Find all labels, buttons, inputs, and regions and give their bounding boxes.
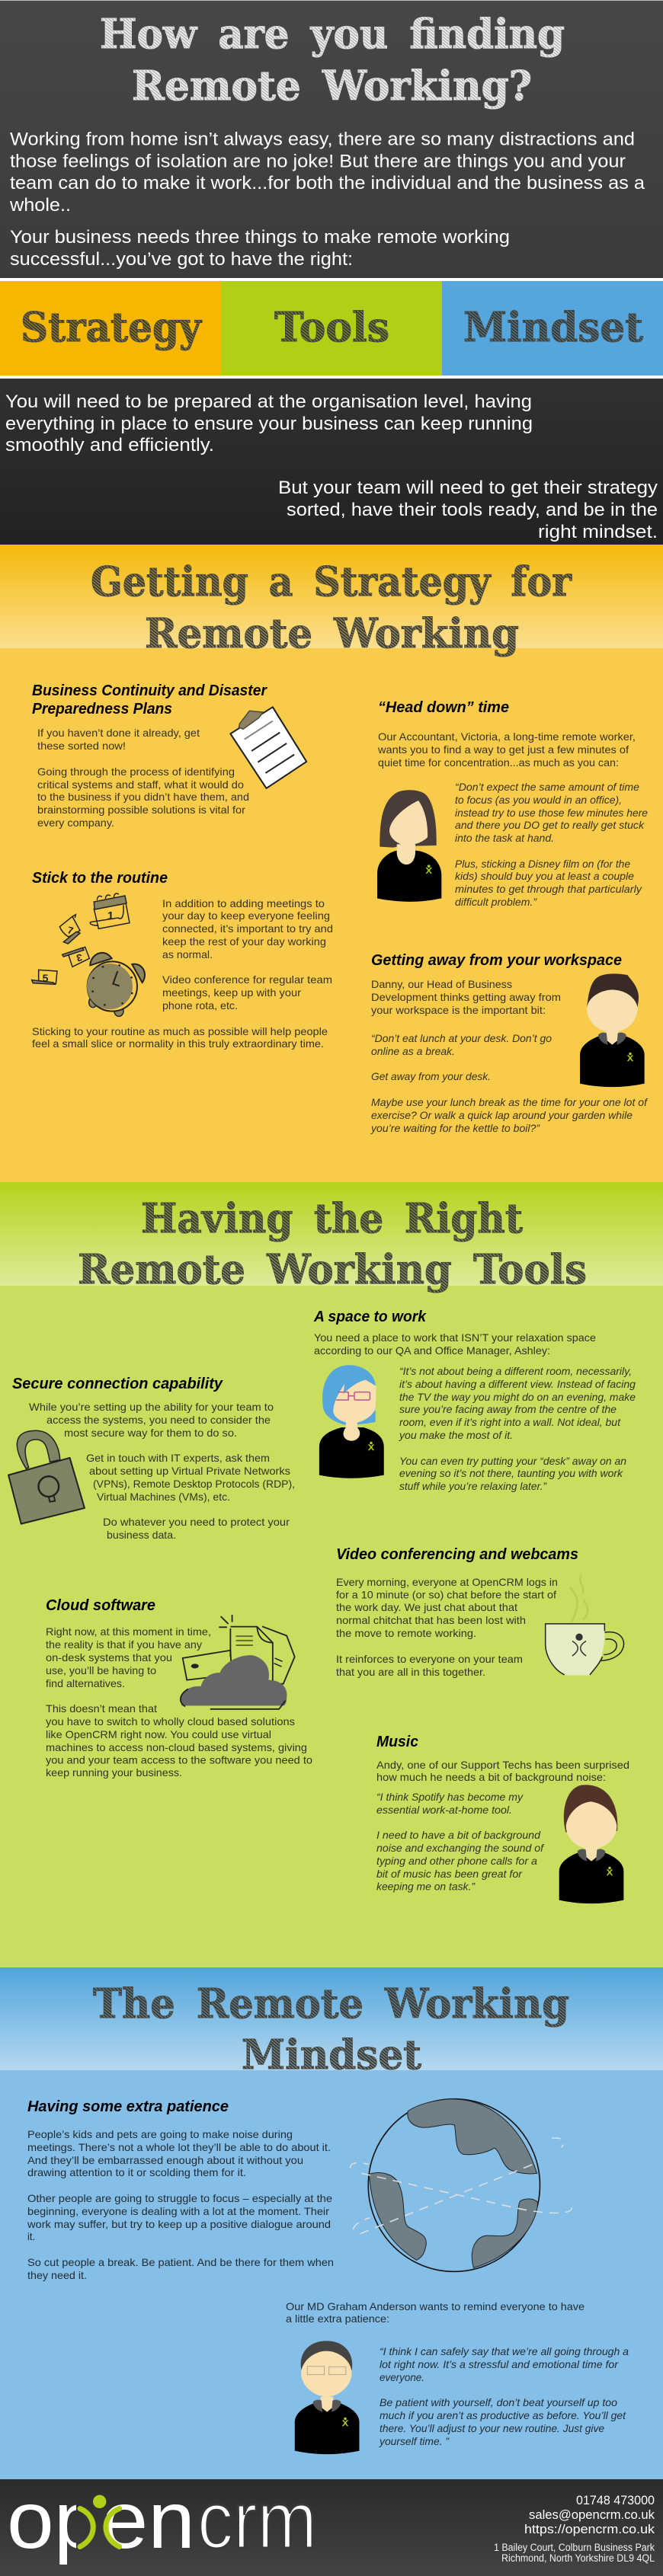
text: continuity plans: every company.: [37, 817, 114, 829]
text: head down intro: wants you to find a way to get just a few minutes of: [377, 743, 629, 756]
text: cloud software: you and your team access to the software you need to: [46, 1753, 312, 1766]
text: video conferencing: for a 10 minute (or so) chat before the start of: [336, 1589, 556, 1601]
heading: continuity plans: Preparedness Plans: [32, 701, 172, 718]
text: head down intro: quiet time for concentration...as much as you can:: [378, 756, 619, 769]
intro text: Working from home isn’t always easy, there are so many distractions and: [10, 129, 635, 149]
quote: Andy: [376, 1791, 545, 1892]
heading: music: Music: [376, 1734, 418, 1750]
quote: Ashley: “It’s not about being a different room, necessarily,: [399, 1365, 632, 1377]
intro text: those feelings of isolation are no joke! But there are things you and your: [10, 151, 626, 172]
pillar: tools: [221, 281, 442, 376]
text: patience: they need it.: [27, 2269, 87, 2281]
quote: Victoria: to focus (as you would in an office),: [455, 794, 622, 806]
text: patience: Other people are going to struggle to focus – especially at the: [27, 2192, 332, 2204]
text: routine: Sticking to your routine as much as possible will help people: [32, 1025, 328, 1037]
panel: mindset section: [0, 1967, 663, 2479]
text: secure connection: [29, 1401, 295, 1541]
heading: cloud software: Cloud software: [46, 1597, 155, 1614]
text: organisation level: [5, 392, 533, 455]
icon: cloud with documents: [181, 1615, 295, 1709]
text: continuity plans: these sorted now!: [37, 740, 126, 752]
heading: mindset: [93, 1980, 569, 2079]
intro text: successful...you’ve got to have the right:: [10, 249, 353, 270]
text: patience: People’s kids and pets are going to make noise during: [27, 2128, 293, 2140]
text: video conferencing: normal chitchat that has been lost with: [336, 1614, 526, 1626]
panel: three pillars: [0, 278, 663, 379]
quote: Ashley: You can even try putting your “desk” away on an: [399, 1455, 626, 1467]
quote: Graham: everyone.: [380, 2371, 424, 2383]
text: secure connection: Do whatever you need to protect your: [103, 1516, 290, 1528]
quote: Graham: yourself time. ”: [379, 2435, 450, 2447]
quote: Victoria: “Don’t expect the same amount of time: [455, 781, 639, 793]
logo: OpenCRM: open: [7, 2475, 195, 2565]
quote: Danny: you’re waiting for the kettle to boil?”: [370, 1122, 540, 1134]
text: patience: it.: [27, 2230, 35, 2242]
quote: Andy: keeping me on task.”: [376, 1880, 476, 1892]
text: routine: as normal.: [162, 948, 213, 960]
panel: organisation and team: [0, 379, 663, 545]
panel: footer: [0, 2475, 663, 2576]
quote: Victoria: difficult problem.”: [455, 896, 537, 908]
text: patience: [27, 2128, 334, 2281]
quote: Ashley: the TV the way you might do on an evening, make: [399, 1391, 636, 1403]
text: workspace: your workspace is the important bit:: [371, 1004, 546, 1016]
logo: OpenCRM: crm: [197, 2475, 317, 2565]
text: a space to work: [314, 1331, 596, 1357]
contact details: Richmond, North Yorkshire DL9 4QL: [501, 2552, 655, 2564]
heading: continuity plans: [32, 682, 267, 718]
heading: tools: Remote Working Tools: [78, 1246, 587, 1293]
text: continuity plans: [37, 727, 249, 829]
text: routine: connected, it’s important to try and: [162, 922, 333, 935]
text: video conferencing: that you are all in this together.: [336, 1666, 485, 1678]
avatar: Graham: [295, 2341, 359, 2454]
quote: Ashley: sure you’re facing away from the centre of the: [399, 1403, 617, 1415]
text: patience: And they’ll be embarrassed enough about it without you: [27, 2154, 303, 2166]
text: managing director intro: [286, 2300, 585, 2325]
heading: strategy: [91, 558, 572, 657]
text: routine: [32, 897, 333, 1050]
text: continuity plans: critical systems and staff, what it would do: [37, 778, 244, 791]
icon: calendars and alarm clock: 7: [66, 924, 75, 937]
text: routine: phone rota, etc.: [162, 999, 238, 1012]
text: cloud software: machines to access non-cloud based systems, giving: [46, 1741, 307, 1753]
heading: tools: Having the Right: [141, 1195, 523, 1242]
quote: Victoria: kids) should buy you at least a couple: [455, 870, 634, 882]
text: managing director intro: a little extra patience:: [286, 2312, 389, 2325]
text: secure connection: (VPNs), Remote Desktop Protocols (RDP),: [93, 1478, 295, 1490]
panel: introduction: [0, 0, 663, 278]
icon: calendars and alarm clock: 5: [43, 972, 49, 984]
quote: Victoria: [455, 781, 648, 908]
quote: Andy: typing and other phone calls for a: [376, 1855, 537, 1867]
text: video conferencing: Every morning, everyone at OpenCRM logs in: [336, 1576, 558, 1588]
quote: Victoria: Plus, sticking a Disney film on (for the: [455, 858, 630, 870]
pillar: strategy: Strategy: [21, 304, 203, 351]
icon: clipboard: [230, 707, 306, 788]
text: continuity plans: If you haven’t done it already, get: [37, 727, 200, 739]
heading: secure connection: Secure connection capability: [12, 1376, 223, 1392]
text: music: Andy, one of our Support Techs has been surprised: [376, 1759, 629, 1771]
intro text: Your business needs three things to make remote working: [10, 227, 510, 248]
text: secure connection: While you’re setting up the ability for your team to: [29, 1401, 274, 1413]
text: routine: Video conference for regular team: [162, 973, 332, 986]
quote: Graham: much if you aren’t as productive as before. You’ll get: [380, 2409, 626, 2421]
text: patience: So cut people a break. Be patient. And be there for them when: [27, 2256, 334, 2268]
quote: Danny: Get away from your desk.: [371, 1070, 491, 1082]
text: secure connection: access the systems, you need to consider the: [46, 1414, 271, 1426]
contact details: https://opencrm.co.uk: [524, 2522, 655, 2536]
text: a space to work: You need a place to work that ISN’T your relaxation space: [314, 1331, 596, 1344]
text: patience: beginning, everyone is dealing with a lot at the moment. Their: [27, 2205, 329, 2217]
quote: Danny: online as a break.: [371, 1045, 455, 1057]
quote: Andy: noise and exchanging the sound of: [376, 1842, 545, 1854]
title: How are you finding: [100, 11, 565, 58]
quote: Andy: I need to have a bit of background: [376, 1829, 541, 1841]
quote: Ashley: [399, 1365, 636, 1492]
text: organisation level: smoothly and efficiently.: [5, 435, 214, 455]
text: cloud software: keep running your business.: [46, 1766, 182, 1779]
text: cloud software: the reality is that if you have any: [46, 1638, 202, 1651]
text: routine: feel a small slice or normality in this truly extraordinary time.: [32, 1037, 324, 1050]
heading: workspace: Getting away from your workspace: [371, 952, 622, 969]
heading: strategy: Remote Working: [145, 610, 519, 657]
text: workspace: [371, 978, 561, 1016]
text: routine: keep the rest of your day working: [162, 935, 326, 948]
text: workspace: Development thinks getting away from: [371, 991, 561, 1003]
text: continuity plans: to the business if you didn’t have them, and: [37, 791, 249, 803]
icon: padlock: [8, 1430, 85, 1524]
heading: strategy: Getting a Strategy for: [91, 558, 572, 606]
text: secure connection: about setting up Virtual Private Networks: [89, 1465, 290, 1477]
text: cloud software: find alternatives.: [46, 1677, 125, 1689]
text: managing director intro: Our MD Graham Anderson wants to remind everyone to have: [286, 2300, 585, 2312]
quote: Danny: [370, 1032, 649, 1134]
quote: Graham: there. You’ll adjust to your new routine. Just give: [380, 2422, 604, 2434]
icon: mug: [546, 1576, 624, 1676]
text: continuity plans: Going through the process of identifying: [37, 765, 235, 778]
text: workspace: Danny, our Head of Business: [371, 978, 512, 990]
quote: Graham: Be patient with yourself, don’t beat yourself up too: [380, 2396, 617, 2408]
heading: video conferencing: Video conferencing and webcams: [336, 1546, 578, 1563]
text: organisation level: everything in place to ensure your business can keep running: [5, 414, 533, 434]
quote: Ashley: room, even if it’s right into a wall. Not ideal, but: [399, 1416, 621, 1428]
quote: Danny: Maybe use your lunch break as the time for your one lot of: [371, 1096, 649, 1108]
quote: Victoria: instead try to use those few minutes here: [455, 807, 648, 819]
icon: calendars and alarm clock: [32, 893, 145, 1016]
contact details: sales@opencrm.co.uk: [529, 2507, 655, 2522]
text: routine: In addition to adding meetings to: [162, 897, 325, 909]
text: secure connection: most secure way for them to do so.: [64, 1427, 237, 1439]
text: head down intro: Our Accountant, Victoria, a long-time remote worker,: [378, 730, 636, 743]
heading: mindset: The Remote Working: [93, 1980, 569, 2028]
quote: Ashley: you make the most of it.: [399, 1429, 513, 1441]
icon: globe: [351, 2099, 572, 2271]
icon: calendars and alarm clock: 1: [107, 909, 114, 922]
contact details: [494, 2493, 655, 2564]
text: team level: But your team will need to get their strategy: [278, 478, 658, 498]
text: patience: meetings. There’s not a whole lot they’ll be able to do about it.: [27, 2141, 331, 2153]
quote: Victoria: minutes to get through that particularly: [455, 883, 642, 895]
contact details: 01748 473000: [576, 2493, 655, 2507]
text: cloud software: Right now, at this moment in time,: [46, 1625, 211, 1638]
heading: patience: Having some extra patience: [27, 2098, 229, 2115]
logo: OpenCRM: [7, 2475, 317, 2565]
text: cloud software: like OpenCRM right now. You could use virtual: [46, 1728, 271, 1740]
quote: Ashley: stuff while you’re relaxing later.”: [399, 1480, 547, 1492]
text: cloud software: [46, 1625, 312, 1779]
intro text: team can do to make it work...for both the individual and the business as a: [10, 173, 645, 193]
text: patience: drawing attention to it or scolding them for it.: [27, 2166, 246, 2178]
text: organisation level: You will need to be prepared at the organisation level, having: [5, 392, 532, 412]
heading: head down time: “Head down” time: [378, 699, 509, 716]
quote: Andy: essential work-at-home tool.: [376, 1804, 512, 1816]
text: cloud software: This doesn’t mean that: [46, 1702, 157, 1715]
text: secure connection: Virtual Machines (VMs), etc.: [97, 1491, 230, 1503]
heading: routine: Stick to the routine: [32, 870, 168, 887]
pillar: tools: Tools: [274, 304, 389, 351]
panel: strategy section: [0, 545, 663, 1182]
panel: tools section: [0, 1182, 663, 1967]
text: team level: [278, 478, 658, 542]
text: secure connection: Get in touch with IT experts, ask them: [86, 1452, 270, 1464]
intro text: whole..: [9, 195, 71, 216]
text: a space to work: according to our QA and Office Manager, Ashley:: [314, 1344, 550, 1357]
title: [100, 11, 565, 110]
avatar: Danny: [580, 973, 645, 1087]
heading: tools: [78, 1195, 587, 1293]
quote: Andy: bit of music has been great for: [376, 1868, 523, 1880]
heading: continuity plans: Business Continuity and Disaster: [32, 682, 267, 699]
text: video conferencing: the work day. We just chat about that: [336, 1601, 517, 1613]
text: cloud software: on-desk systems that you: [46, 1651, 172, 1664]
quote: Ashley: it’s about having a different view. Instead of facing: [399, 1378, 636, 1390]
text: team level: sorted, have their tools ready, and be in the: [287, 500, 658, 520]
pillar: strategy: [0, 281, 221, 376]
text: team level: right mindset.: [538, 522, 658, 542]
heading: a space to work: A space to work: [313, 1309, 427, 1325]
quote: Graham: [379, 2345, 629, 2447]
pillar: mindset: [442, 281, 663, 376]
text: cloud software: you have to switch to wholly cloud based solutions: [46, 1715, 295, 1727]
text: video conferencing: the move to remote working.: [336, 1627, 476, 1639]
quote: Victoria: and there you DO get to really get stuck: [455, 819, 645, 831]
heading: mindset: Mindset: [242, 2031, 422, 2079]
quote: Danny: “Don’t eat lunch at your desk. Don’t go: [371, 1032, 552, 1044]
text: continuity plans: brainstorming possible solutions is vital for: [37, 804, 245, 816]
quote: Victoria: into the task at hand.: [455, 832, 554, 844]
avatar: Ashley: [319, 1365, 384, 1478]
text: secure connection: business data.: [107, 1529, 176, 1541]
text: patience: work may suffer, but try to keep up a positive dialogue around: [27, 2218, 331, 2230]
avatar: Andy: [559, 1785, 623, 1903]
quote: Danny: exercise? Or walk a quick lap around your garden while: [371, 1109, 633, 1121]
text: head down intro: [377, 730, 636, 769]
pillar: mindset: Mindset: [463, 304, 644, 351]
text: video conferencing: It reinforces to everyone on your team: [336, 1653, 523, 1665]
text: cloud software: use, you’ll be having to: [46, 1664, 156, 1676]
quote: Ashley: evening so it’s not there, taunting you with work: [399, 1467, 623, 1479]
text: routine: your day to keep everyone feeling: [162, 909, 330, 922]
quote: Andy: “I think Spotify has become my: [376, 1791, 524, 1803]
title: Remote Working?: [132, 62, 532, 110]
intro text: [9, 129, 645, 270]
text: routine: meetings, keep up with your: [162, 986, 301, 999]
icon: calendars and alarm clock: 3: [75, 951, 83, 964]
quote: Graham: lot right now. It’s a stressful and emotional time for: [380, 2358, 619, 2370]
text: music: [376, 1759, 629, 1783]
avatar: Victoria: [377, 790, 441, 902]
text: music: how much he needs a bit of background noise:: [376, 1771, 606, 1783]
quote: Graham: “I think I can safely say that we’re all going through a: [380, 2345, 629, 2357]
text: video conferencing: [336, 1576, 558, 1678]
